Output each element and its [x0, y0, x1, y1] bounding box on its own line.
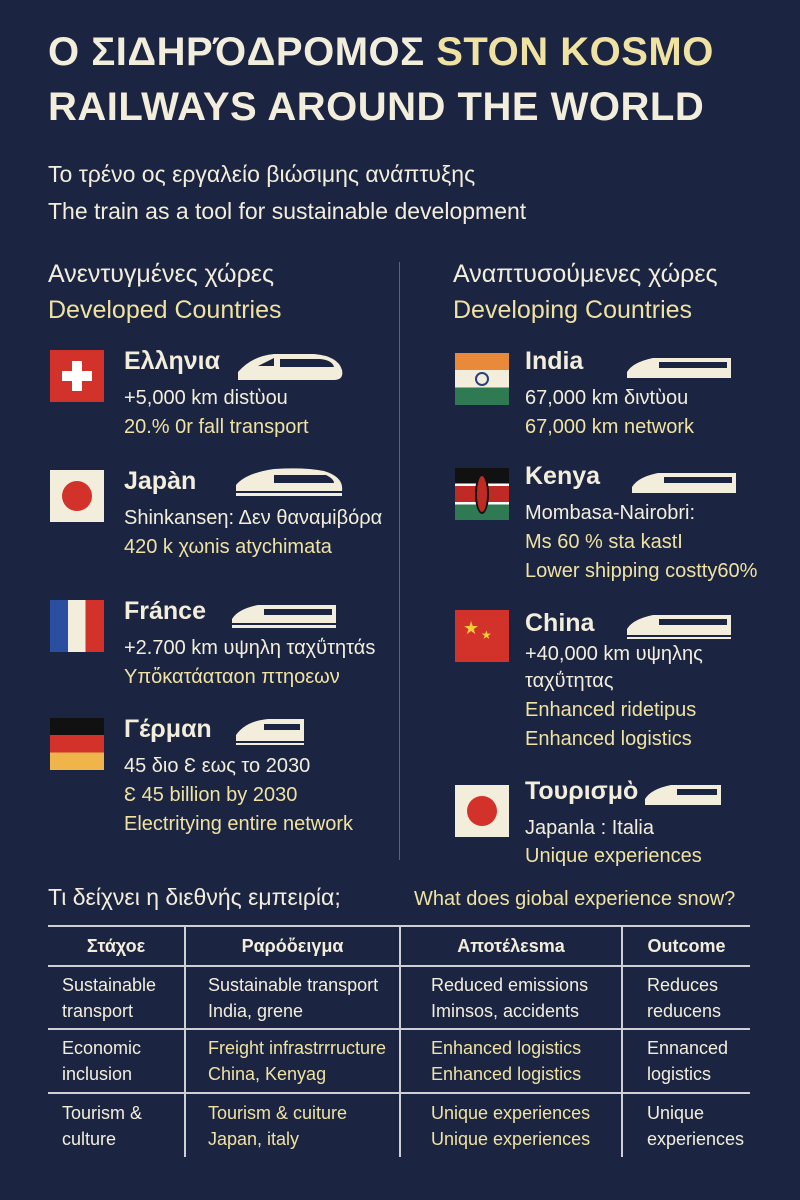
title: Ο ΣΙΔΗΡΌΔΡΟΜΟΣ STON KOSMO [48, 30, 714, 74]
entry: tourism japan: Unique experiences [525, 845, 702, 867]
table: global experience: Economic [62, 1038, 141, 1058]
entry: india [455, 347, 731, 438]
table: global experience: Tourism & [62, 1102, 142, 1122]
table: global experience: Enhanced logistics [431, 1064, 581, 1084]
icon: china flag [455, 610, 509, 662]
entry: china: Enhanced ridetipus [525, 699, 696, 721]
entry: china: Enhanced logistics [525, 728, 692, 750]
entry: china: +40,000 km υψηλης [525, 643, 703, 665]
icon: india flag [455, 353, 509, 405]
entry: switzerland [50, 347, 342, 438]
table: global experience: Outcome [647, 936, 726, 956]
icon: germany flag [50, 718, 104, 770]
entry: india: 67,000 km network [525, 416, 694, 438]
subtitle [48, 161, 526, 224]
icon: china flag: ★ [481, 628, 492, 642]
entry: switzerland: Ελληνια [124, 347, 220, 375]
icon: kenya flag [455, 468, 509, 520]
icon: japan flag [455, 785, 509, 837]
heading: developing: Developing Countries [453, 296, 692, 324]
table: global experience: Στάχοε [87, 936, 145, 956]
entry: germany: 45 διο Ɛ εως το 2030 [124, 755, 310, 777]
table: global experience: Reduces [647, 974, 718, 994]
table: global experience: inclusion [62, 1064, 132, 1084]
entry: germany: Ɛ 45 billion by 2030 [124, 784, 297, 806]
heading: developed [48, 260, 281, 324]
entry: kenya: Lower shipping costty60% [525, 560, 757, 582]
entry: kenya: Ms 60 % sta kastI [525, 531, 683, 553]
table: global experience: Tourism & cuiture [208, 1102, 347, 1122]
icon: japan flag [50, 470, 104, 522]
icon: china flag: ★ [463, 618, 479, 638]
heading: developed: Ανεντυγμένες χώρες [48, 260, 274, 288]
entry: switzerland: 20.% 0r fall transport [124, 416, 309, 438]
entry: india: India [525, 347, 583, 375]
table: global experience: Sustainable transport [208, 974, 378, 994]
entry: tourism japan: Japanla : Italia [525, 817, 654, 839]
entry: germany: Electritying entire network [124, 813, 353, 835]
subtitle: The train as a tool for sustainable development [48, 198, 526, 224]
table: global experience: transport [62, 1000, 133, 1020]
table: global experience: experiences [647, 1128, 744, 1148]
entry: china: China [525, 609, 594, 637]
heading: developed: Developed Countries [48, 296, 281, 324]
subtitle: Το τρένο ος εργαλείο βιώσιμης ανάπτυξης [48, 161, 475, 187]
entry: france: Fránce [124, 597, 206, 625]
panel: developing countries [455, 347, 757, 867]
entry: france: +2.700 km υψηλη ταχΰτητάs [124, 637, 375, 659]
heading: developing [453, 260, 718, 324]
table: global experience: Unique experiences [431, 1128, 590, 1148]
entry: china [455, 609, 731, 750]
entry: kenya: Mombasa-Nairobri: [525, 502, 695, 524]
table: global experience [48, 925, 750, 1157]
table: global experience: Enhanced logistics [431, 1038, 581, 1058]
title [48, 30, 714, 129]
icon: swiss flag [50, 350, 104, 402]
entry: switzerland: +5,000 km distὺou [124, 387, 288, 409]
table heading: What does giobal experience snow? [414, 888, 735, 910]
table: global experience: Japan, italy [208, 1128, 299, 1148]
table: global experience: reducens [647, 1000, 721, 1020]
entry: tourism japan [455, 777, 721, 867]
entry: japan [50, 467, 382, 558]
icon: france flag [50, 600, 104, 652]
entry: kenya [455, 462, 757, 582]
table: global experience: Ραρόὄειγμα [242, 936, 343, 956]
table: global experience: Unique experiences [431, 1102, 590, 1122]
entry: tourism japan: Τουρισμὸ [525, 777, 638, 805]
entry: japan: Shinkanseη: Δεν θαναμiβόρα [124, 507, 382, 529]
table: global experience: Iminsos, accidents [431, 1000, 579, 1020]
table: global experience: culture [62, 1128, 116, 1148]
entry: france: Υπὄκατάαταon πτηοεων [124, 666, 340, 688]
entry: france [50, 597, 375, 688]
entry: india: 67,000 km δινtὺou [525, 387, 688, 409]
table: global experience: Unique [647, 1102, 704, 1122]
table heading: Τι δείχνει η διεθνής εμπειρία; [48, 884, 341, 910]
table: global experience: Sustainable [62, 974, 156, 994]
table: global experience: Reduced emissions [431, 974, 588, 994]
table: global experience: India, grene [208, 1000, 303, 1020]
entry: japan: 420 k χωnis atychimata [124, 536, 332, 558]
entry: japan: Japàn [124, 467, 196, 495]
table: global experience: Ennanced [647, 1038, 728, 1058]
entry: kenya: Kenya [525, 462, 600, 490]
title: RAILWAYS AROUND THE WORLD [48, 85, 704, 129]
entry: germany: Γέρμαn [124, 715, 212, 743]
table: global experience: logistics [647, 1064, 711, 1084]
table: global experience: China, Kenyag [208, 1064, 326, 1084]
heading: developing: Αναπτυσούμενες χώρες [453, 260, 718, 288]
panel: developed countries [50, 347, 382, 835]
table: global experience: Αποτέλεsma [457, 936, 565, 956]
entry: china: ταχΰτητας [525, 670, 613, 692]
entry: germany [50, 715, 353, 835]
table heading [48, 884, 735, 910]
table: global experience: Freight infrastrrructure [208, 1038, 386, 1058]
